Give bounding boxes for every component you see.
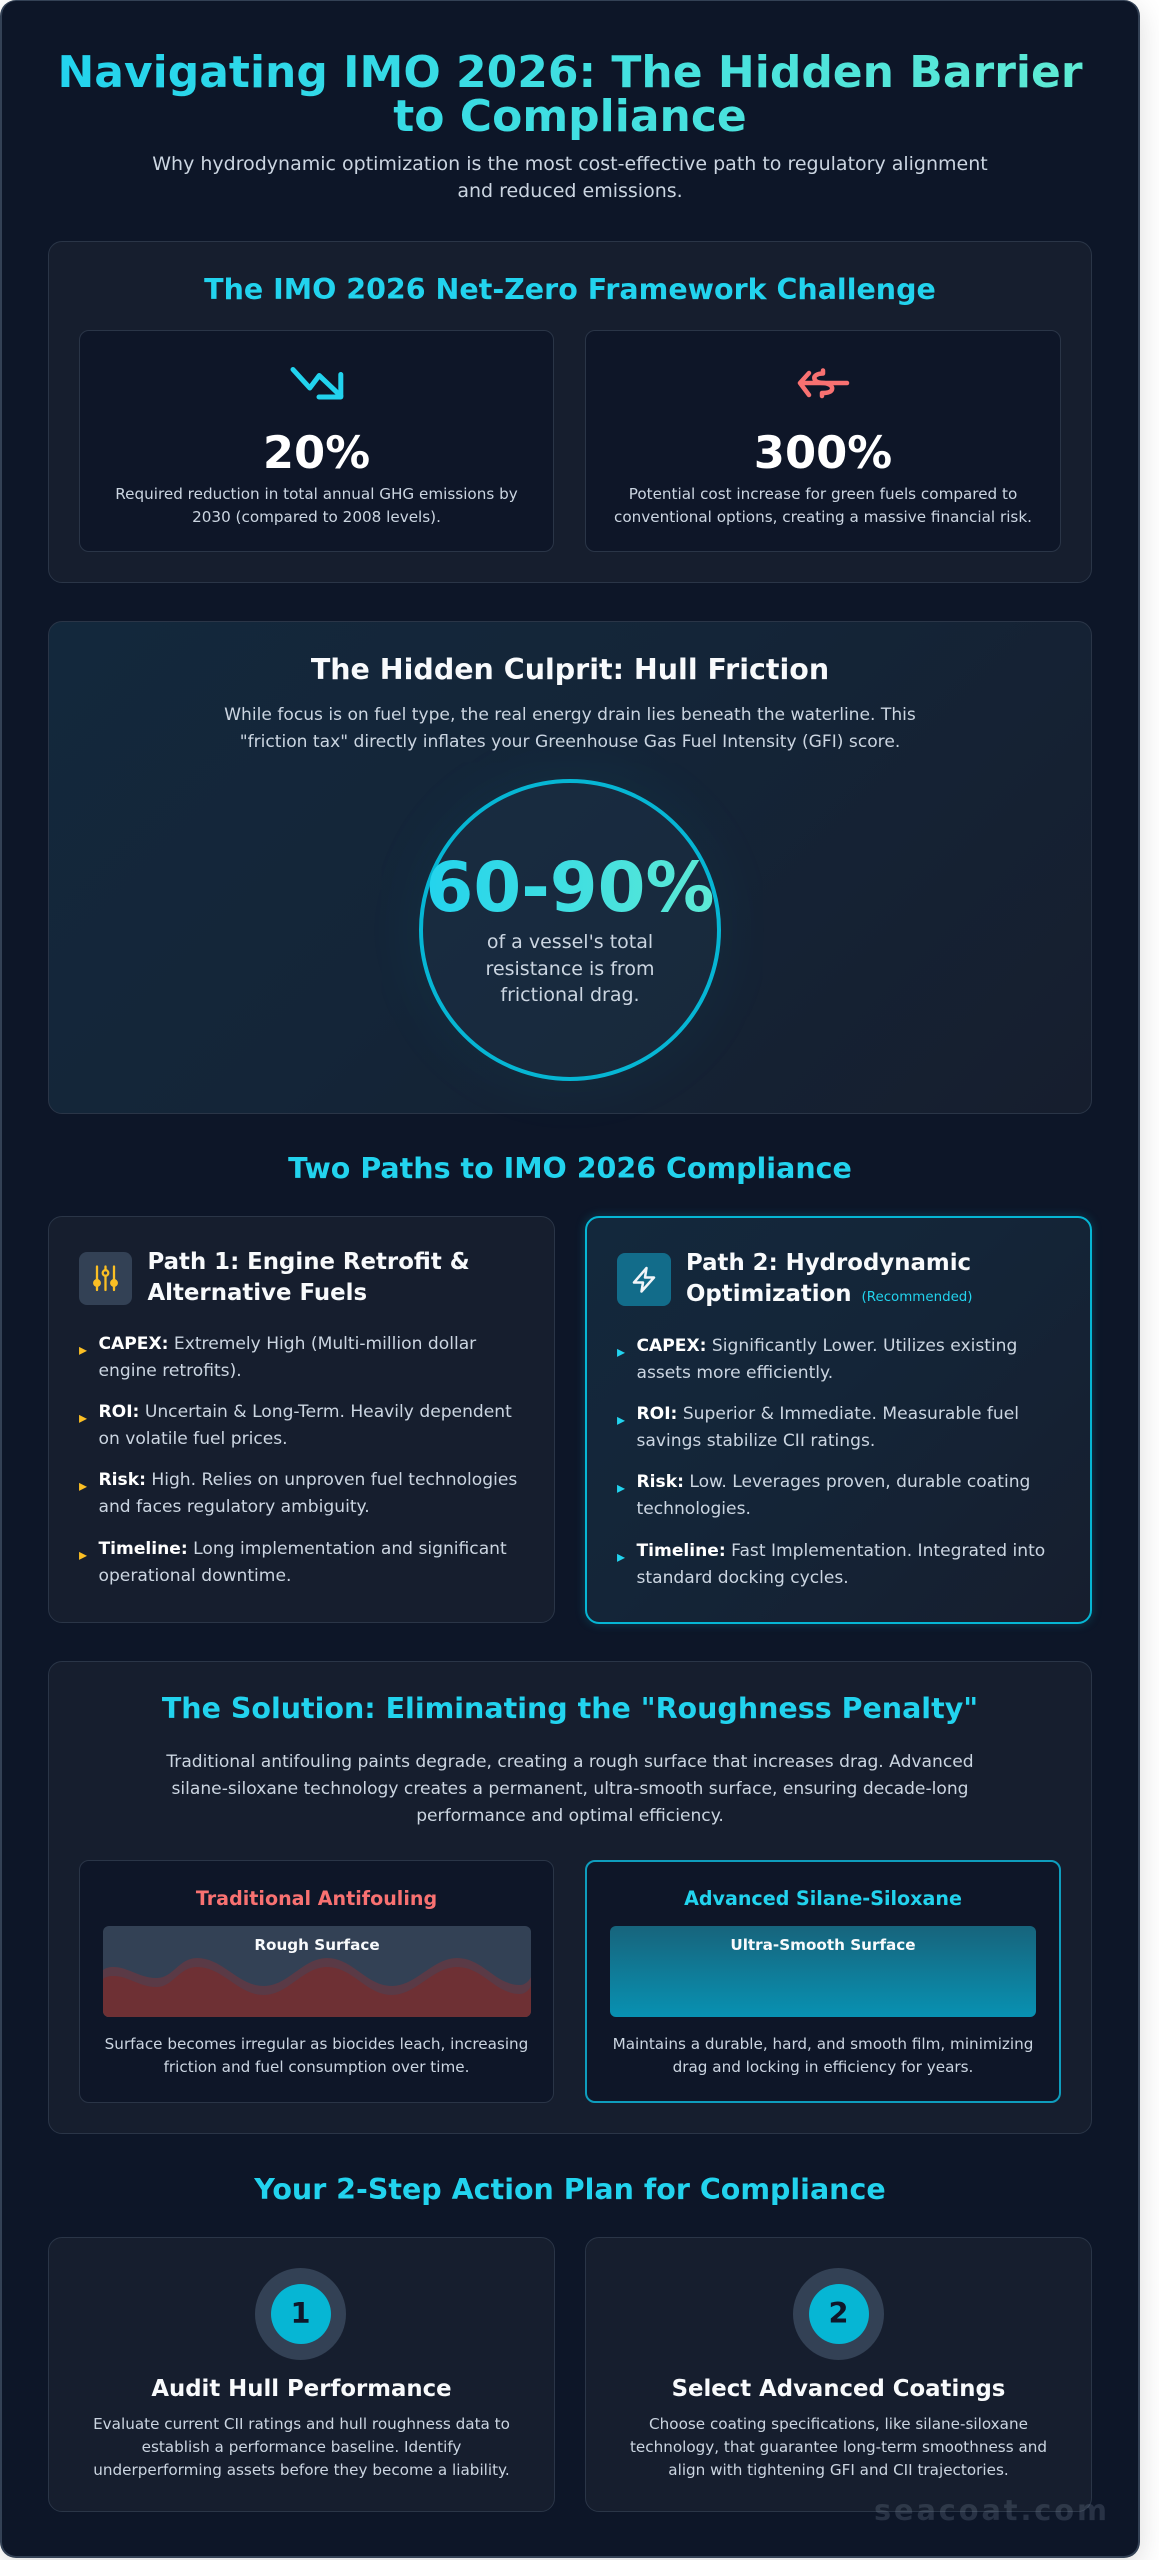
step description: underperforming assets before they become a liability. <box>93 2461 510 2479</box>
bullet: capex: engine retrofits). <box>98 1361 242 1381</box>
description: friction and fuel consumption over time. <box>164 2058 469 2076</box>
bullet: risk: Risk: Low. Leverages proven, durable coating <box>636 1472 1030 1492</box>
bullet: roi: ▸ <box>79 1408 87 1427</box>
diagram label: Rough Surface <box>254 1936 380 1954</box>
title: Navigating IMO 2026: The Hidden Barrier <box>57 46 1083 98</box>
bullet: risk: technologies. <box>636 1499 751 1519</box>
diagram: rough surface <box>103 1926 531 2017</box>
description: "friction tax" directly inflates your Greenhouse Gas Fuel Intensity (GFI) score. <box>240 732 900 752</box>
number circle <box>808 2284 868 2344</box>
bullet: risk <box>617 1472 1030 1519</box>
path 1 title: Alternative Fuels <box>148 1280 367 1306</box>
description: Maintains a durable, hard, and smooth film, minimizing <box>613 2035 1033 2053</box>
panel: path 1 <box>48 1216 555 1623</box>
path 2 title: Path 2: Hydrodynamic <box>686 1250 971 1276</box>
bullet: capex <box>79 1334 476 1381</box>
heading: challenge: The IMO 2026 Net-Zero Framework Challenge <box>204 273 936 306</box>
panel: net-zero framework challenge <box>48 241 1092 583</box>
step description <box>93 2415 510 2479</box>
bullet: capex: CAPEX: Extremely High (Multi-million dollar <box>98 1334 476 1354</box>
path 1 title: Path 1: Engine Retrofit & <box>148 1249 470 1275</box>
step description: Choose coating specifications, like silane-siloxane <box>649 2415 1028 2433</box>
bullet: risk: ▸ <box>79 1476 87 1495</box>
step title: Select Advanced Coatings <box>672 2376 1005 2402</box>
description: While focus is on fuel type, the real energy drain lies beneath the waterline. This <box>224 705 916 725</box>
description: silane-siloxane technology creates a permanent, ultra-smooth surface, ensuring decade-long <box>171 1779 969 1799</box>
bullet: roi <box>79 1402 512 1449</box>
step number <box>255 2268 346 2360</box>
panel: the solution <box>48 1661 1092 2134</box>
subtitle <box>152 153 988 202</box>
description <box>105 2035 528 2076</box>
title: to Compliance <box>393 91 747 142</box>
bullet: capex: ▸ <box>617 1342 625 1361</box>
path 2 title <box>686 1250 973 1306</box>
number circle: 2 <box>828 2296 849 2330</box>
description <box>614 485 1032 526</box>
stat caption: frictional drag. <box>500 984 640 1006</box>
bullet: roi: savings stabilize CII ratings. <box>636 1431 875 1451</box>
heading: two paths: Two Paths to IMO 2026 Compliance <box>288 1152 852 1185</box>
heading: action plan: Your 2-Step Action Plan for Compliance <box>254 2173 886 2206</box>
icon: bolt <box>617 1253 671 1306</box>
bullet: risk <box>79 1470 517 1517</box>
step title: Audit Hull Performance <box>151 2376 452 2402</box>
icon: dollar arrow <box>798 368 850 398</box>
stat: 20%: 20% <box>263 426 370 479</box>
stat caption: resistance is from <box>486 958 654 980</box>
description: Traditional antifouling paints degrade, creating a rough surface that increases drag. Advanced <box>166 1752 974 1772</box>
bullet: timeline: Timeline: Fast Implementation. Integrated into <box>636 1541 1045 1561</box>
panel: hidden culprit <box>48 621 1092 1114</box>
bullet: roi: ROI: Superior & Immediate. Measurable fuel <box>636 1404 1019 1424</box>
bullet: roi <box>617 1404 1019 1451</box>
stat caption: of a vessel's total <box>487 931 653 953</box>
path 2 title: Optimization (Recommended) <box>686 1280 973 1306</box>
description: performance and optimal efficiency. <box>416 1806 724 1826</box>
bullet: capex: assets more efficiently. <box>636 1363 833 1383</box>
panel: step 2 <box>585 2237 1092 2512</box>
bullet: timeline: ▸ <box>79 1545 87 1564</box>
bullet: capex <box>617 1336 1017 1383</box>
number circle <box>270 2284 330 2344</box>
bullet: capex: CAPEX: Significantly Lower. Utilizes existing <box>636 1336 1017 1356</box>
description: Surface becomes irregular as biocides leach, increasing <box>105 2035 528 2053</box>
description <box>613 2035 1033 2076</box>
heading: roughness penalty: The Solution: Eliminating the "Roughness Penalty" <box>162 1692 978 1725</box>
bullet: capex: ▸ <box>79 1340 87 1359</box>
card: traditional antifouling <box>79 1860 554 2103</box>
description: conventional options, creating a massive financial risk. <box>614 508 1032 526</box>
icon: trending down <box>290 367 344 400</box>
watermark: seacoat.com <box>874 2493 1110 2527</box>
description: Required reduction in total annual GHG emissions by <box>115 485 518 503</box>
heading: hull friction: The Hidden Culprit: Hull Friction <box>311 653 829 686</box>
bullet: timeline <box>79 1539 507 1586</box>
bullet: timeline: Timeline: Long implementation and significant <box>98 1539 507 1559</box>
icon: sliders <box>79 1252 132 1305</box>
number circle: 1 <box>290 2296 311 2330</box>
stat: 60-90%: 60-90% <box>426 848 714 928</box>
step description <box>630 2415 1047 2479</box>
subtitle: and reduced emissions. <box>457 180 683 202</box>
bullet: risk: ▸ <box>617 1478 625 1497</box>
description: Potential cost increase for green fuels compared to <box>629 485 1017 503</box>
bullet: risk: Risk: High. Relies on unproven fuel technologies <box>98 1470 517 1490</box>
step description: technology, that guarantee long-term smoothness and <box>630 2438 1047 2456</box>
wave layers <box>103 1958 531 2017</box>
card: advanced silane-siloxane <box>585 1860 1061 2103</box>
step number <box>793 2268 884 2360</box>
bullet: roi: ▸ <box>617 1410 625 1429</box>
step description: Evaluate current CII ratings and hull roughness data to <box>93 2415 510 2433</box>
panel: path 2 recommended <box>585 1216 1092 1624</box>
step description: establish a performance baseline. Identify <box>142 2438 461 2456</box>
path 1 list <box>79 1334 517 1586</box>
path 1 title <box>148 1249 470 1306</box>
path 2 list <box>617 1336 1045 1588</box>
card title: Traditional Antifouling <box>196 1887 437 1910</box>
stat circle <box>419 779 721 1081</box>
bullet: risk: and faces regulatory ambiguity. <box>98 1497 370 1517</box>
bullet: roi: ROI: Uncertain & Long-Term. Heavily dependent <box>98 1402 512 1422</box>
card title: Advanced Silane-Siloxane <box>684 1887 962 1910</box>
step description: align with tightening GFI and CII trajectories. <box>668 2461 1009 2479</box>
header <box>57 46 1083 202</box>
description <box>224 705 916 752</box>
card: 20 percent <box>79 330 554 552</box>
card: 300 percent <box>585 330 1061 552</box>
panel: step 1 <box>48 2237 555 2512</box>
description: drag and locking in efficiency for years. <box>673 2058 973 2076</box>
title <box>50 46 1090 146</box>
bullet: timeline: ▸ <box>617 1547 625 1566</box>
diagram label: Ultra-Smooth Surface <box>730 1936 916 1954</box>
description <box>166 1752 974 1826</box>
description <box>115 485 518 526</box>
subtitle: Why hydrodynamic optimization is the most cost-effective path to regulatory alignment <box>152 153 988 175</box>
diagram: smooth surface <box>610 1926 1036 2017</box>
bullet: timeline: operational downtime. <box>98 1566 291 1586</box>
bullet: roi: on volatile fuel prices. <box>98 1429 288 1449</box>
stat: 300%: 300% <box>754 426 892 479</box>
bullet: timeline: standard docking cycles. <box>636 1568 849 1588</box>
bullet: timeline <box>617 1541 1045 1588</box>
description: 2030 (compared to 2008 levels). <box>192 508 441 526</box>
stat caption <box>486 931 654 1006</box>
